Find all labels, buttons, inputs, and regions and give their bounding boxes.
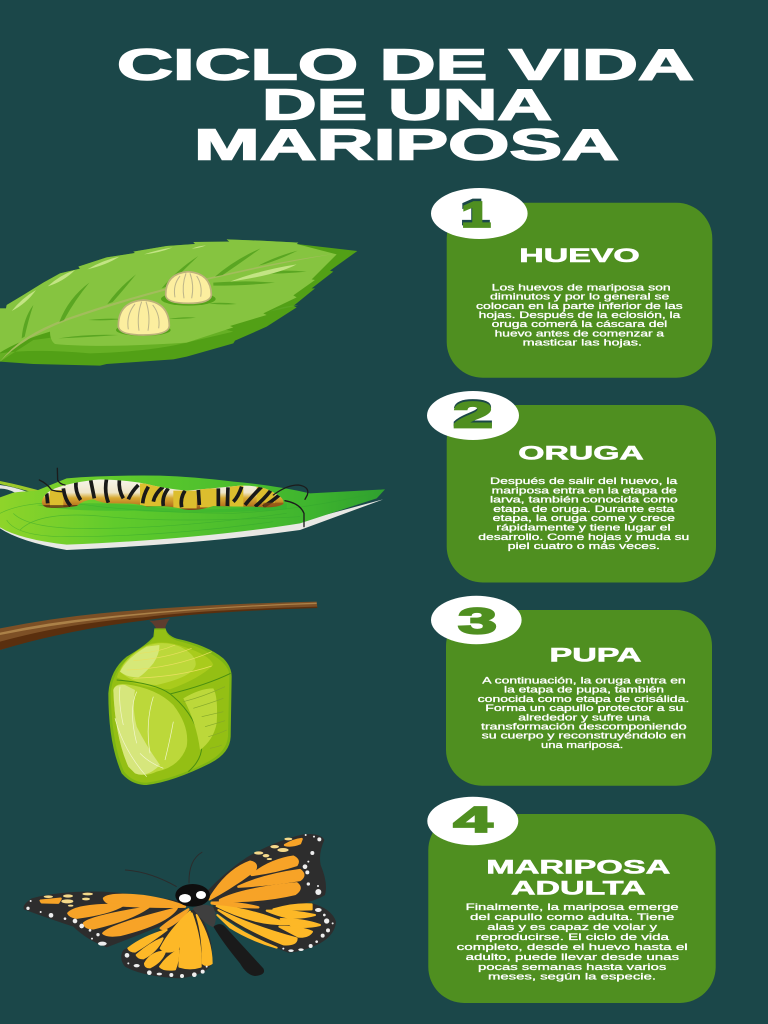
body text: su cuerpo y reconstruyéndolo en (482, 731, 686, 741)
number badge: 2 (453, 394, 493, 436)
title: MARIPOSA (194, 120, 619, 170)
card 4: mariposa adulta (427, 797, 716, 1003)
heading (486, 857, 670, 899)
wing spots (44, 838, 292, 907)
heading: ORUGA (518, 443, 644, 465)
yellow hindwing cells (128, 904, 320, 970)
chrysalis top section (117, 643, 213, 689)
chrysalis seam (117, 680, 202, 772)
body text: rápidamente y tiene lugar el (496, 522, 671, 532)
wing shapes (24, 834, 336, 978)
illustration: monarch butterfly (24, 834, 336, 978)
body text: A continuación, la oruga entra en (482, 675, 686, 685)
body text: pocas semanas hasta varios (478, 962, 667, 972)
card panel (446, 610, 712, 786)
body text (478, 476, 689, 551)
body text: larva, también conocida como (490, 495, 678, 505)
card panel (447, 405, 716, 582)
leaf veins (22, 248, 307, 338)
number badge: 1 (461, 194, 491, 235)
number badge: 1 (460, 192, 490, 232)
number badge (431, 188, 528, 239)
chrysalis wing (113, 684, 187, 775)
body text: una mariposa. (541, 740, 623, 750)
body text: etapa, la oruga come y crece (493, 513, 675, 523)
leaf highlights (12, 245, 297, 311)
leaf body (0, 476, 385, 545)
heading: MARIPOSA (486, 857, 670, 879)
body text (457, 902, 688, 982)
number badge (427, 391, 519, 440)
body text: del capullo como adulta. Tiene (470, 912, 674, 922)
body text: diminutos y por lo general se (490, 292, 669, 302)
body text: completo, desde el huevo hasta el (457, 942, 688, 952)
heading: PUPA (550, 645, 642, 667)
title: CICLO DE VIDA (117, 40, 694, 90)
number badge: 3 (458, 600, 497, 642)
body text: adulto, puede llevar desde unas (466, 952, 680, 962)
body text: desarrollo. Come hojas y muda su (478, 532, 689, 542)
orange forewing cells (41, 839, 303, 936)
body text: transformación descomponiendo (481, 722, 687, 732)
butterfly head (175, 884, 210, 907)
body text: piel cuatro o más veces. (508, 541, 660, 551)
chrysalis body (108, 628, 232, 785)
body text: alas y es capaz de volar y (487, 922, 658, 932)
number badge (431, 596, 522, 644)
card panel (447, 203, 712, 378)
egg 1 (116, 300, 171, 336)
card panel (428, 814, 716, 1003)
body text: meses, según la especie. (488, 972, 656, 982)
egg 2 (161, 272, 216, 306)
body text: mariposa entra en la etapa de (492, 485, 677, 495)
body text: reproducirse. El ciclo de vida (476, 932, 669, 942)
caterpillar (39, 468, 308, 527)
heading: HUEVO (519, 245, 640, 267)
body text: Los huevos de mariposa son (492, 282, 671, 292)
leaf white rim (0, 499, 383, 550)
number badge (427, 797, 518, 845)
card 1: huevo (431, 188, 712, 378)
illustration: leaf with eggs (0, 239, 357, 366)
body text: oruga comerá la cáscara del (492, 319, 667, 329)
body text (476, 282, 684, 348)
body text: masticar las hojas. (523, 338, 642, 348)
title: DE UNA (262, 80, 552, 130)
butterfly eyes (179, 891, 206, 903)
illustration: leaf with caterpillar (0, 468, 385, 550)
body text: conocida como etapa de crisálida. (478, 694, 689, 704)
butterfly abdomen (213, 924, 264, 976)
body text: la etapa de pupa, también (504, 684, 664, 694)
body text: huevo antes de comenzar a (495, 328, 664, 338)
illustration: chrysalis on branch (0, 602, 317, 785)
chrysalis right panel (183, 688, 217, 750)
body text: Finalmente, la mariposa emerge (466, 902, 679, 912)
butterfly thorax (193, 905, 216, 927)
heading: ADULTA (511, 877, 646, 899)
body text: Después de salir del huevo, la (490, 476, 677, 486)
card 3: pupa (431, 596, 712, 786)
body text: Forma un capullo protector a su (485, 703, 683, 713)
antennae (39, 468, 308, 527)
branch (0, 602, 317, 650)
body text: hojas. Después de la eclosión, la (479, 310, 680, 320)
number badge: 4 (454, 799, 492, 840)
antennae (125, 852, 202, 887)
card 2: oruga (427, 391, 716, 582)
body text: colocan en la parte inferior de las (476, 301, 684, 311)
title (117, 40, 694, 170)
body text (478, 675, 689, 750)
white margin dots (26, 834, 334, 978)
body text: etapa de oruga. Durante esta (493, 504, 674, 514)
body text: alrededor y sufre una (518, 712, 650, 722)
number badge: 2 (453, 392, 493, 434)
